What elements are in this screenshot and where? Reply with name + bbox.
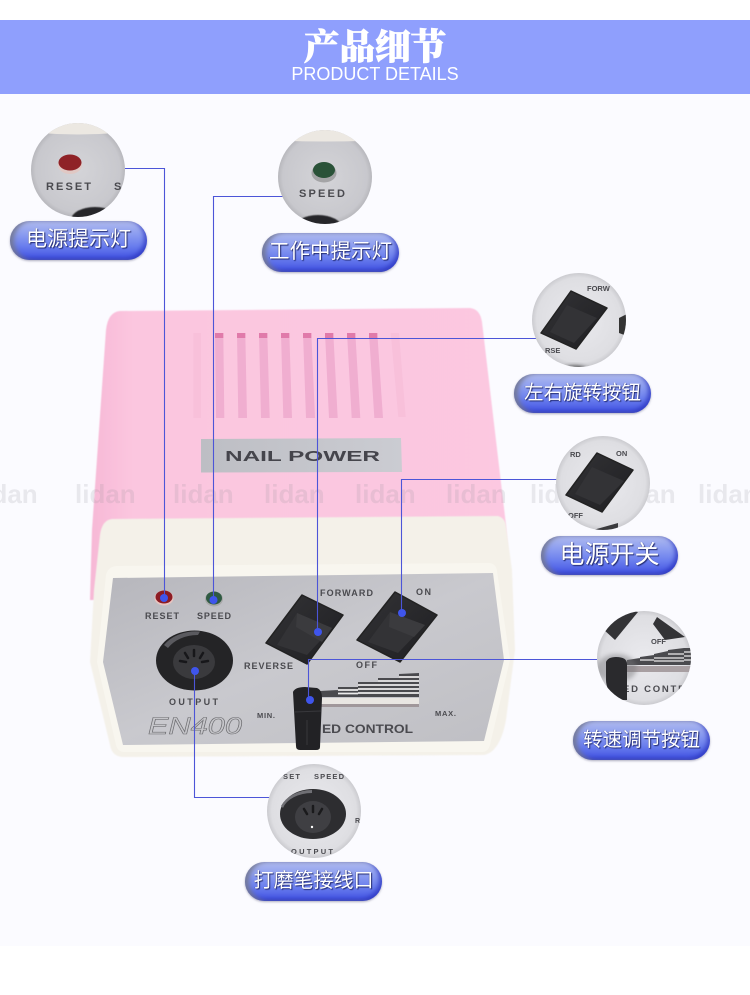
detail circle: power switch: ON [616,449,627,458]
ventilation slots [193,333,406,418]
detail circle: speed light: SPEED [299,188,345,200]
header banner [0,20,750,94]
indicator: reset led [154,590,174,606]
leader lines [125,168,597,798]
detail circle: forward reverse switch: RSE [545,346,560,355]
watermark: lidan [530,479,591,509]
watermark: lidan [75,479,136,509]
detail circle: forward reverse switch [532,273,626,367]
panel labels: MAX. [435,709,456,718]
panel labels: FORWARD [320,588,374,598]
panel labels: ED CONTROL [322,724,413,736]
pill label: working indicator: 工作中提示灯 [269,240,392,263]
panel labels [145,587,456,736]
detail circle: speed control [596,605,692,706]
watermark: lidan [264,479,325,509]
pill label: power switch: 电源开关 [559,541,660,569]
pill label: working indicator [262,233,399,272]
detail circle: output socket: SPEED [314,772,345,781]
panel labels: RESET [145,611,180,621]
pill label: handpiece port [245,862,382,901]
pill label: direction switch: 左右旋转按钮 [524,382,641,404]
output socket [156,630,233,690]
panel labels: OUTPUT [169,697,218,707]
panel labels: REVERSE [244,661,293,671]
watermark: lidan [355,479,416,509]
pill label: power switch [541,536,678,575]
pill label: speed knob: 转速调节按钮 [583,729,700,751]
watermark [0,479,750,509]
watermark: lidan [173,479,234,509]
detail circle: output socket: OUTPUT [291,847,333,856]
detail circle: power switch: OFF [568,511,583,520]
anchor dots [160,594,406,704]
detail circle: forward reverse switch: FORW [587,284,611,293]
detail circle: reset light: RESET [46,181,91,193]
cream lower housing [90,516,515,757]
pill label: direction switch [514,374,651,413]
pill label: power indicator [10,221,147,260]
pill label: speed knob [573,721,710,760]
silver control panel [103,573,504,745]
on off rocker switch [357,592,437,662]
panel labels: OFF [356,660,378,670]
device: nail drill machine [90,308,515,757]
detail circle: power switch [555,435,651,532]
detail circle: output socket: R [355,818,360,825]
watermark: lidan [615,479,676,509]
nameplate [201,438,402,472]
pill label: power indicator: 电源提示灯 [26,228,131,251]
forward reverse rocker switch [266,595,343,664]
speed slider knob [293,687,322,750]
subtitle: PRODUCT DETAILS [291,64,459,84]
detail circle: speed control: OFF [651,637,666,646]
pill label: handpiece port: 打磨笔接线口 [254,870,374,892]
detail circle: output socket [266,763,362,859]
detail circle: reset light [31,123,125,217]
detail circle: speed light [278,130,372,224]
panel labels: ON [416,587,431,597]
detail circle: speed control: ED CONTR [623,684,685,695]
title: 产品细节 [304,27,446,67]
detail circle: power switch: RD [570,450,581,459]
indicator: speed led [205,592,223,606]
panel labels: MIN. [257,711,275,720]
speed ramp graphic [320,673,419,707]
watermark: lidan [446,479,507,509]
front panel ledge [97,563,510,752]
panel labels: SPEED [197,611,232,621]
nameplate: NAIL POWER [225,448,380,465]
model name: EN400 [148,713,243,740]
device pink upper body [90,308,512,600]
detail circle: reset light: S [114,181,121,193]
detail circle: output socket: SET [283,772,300,781]
